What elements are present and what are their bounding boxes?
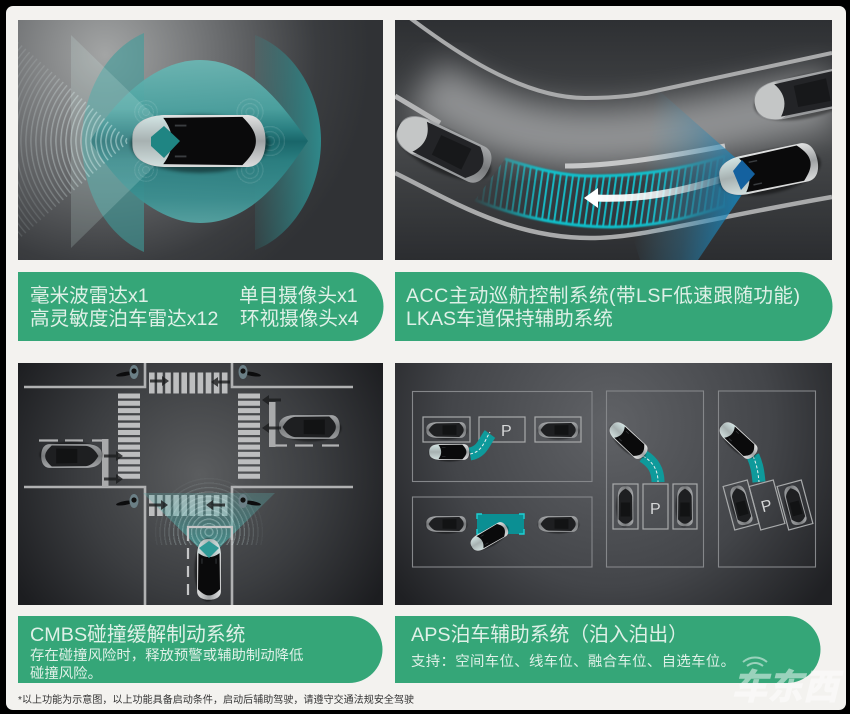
long range wedge xyxy=(71,36,154,248)
CMBS description: 碰撞风险。 xyxy=(30,665,102,682)
CMBS heading: CMBS碰撞缓解制动系统 xyxy=(30,624,245,646)
stop line left xyxy=(39,439,102,442)
parking car xyxy=(429,444,470,462)
crosswalk top xyxy=(149,372,229,394)
parked car xyxy=(538,422,579,440)
caption text right: 单目摄像头x1 xyxy=(239,285,358,307)
arrow xyxy=(150,376,169,386)
P labels: P xyxy=(759,497,774,516)
parking slots xyxy=(423,417,813,530)
arrow xyxy=(104,451,123,461)
dashed guide lines xyxy=(470,432,759,482)
frames xyxy=(412,391,816,567)
arrow xyxy=(104,474,123,484)
parked car xyxy=(426,422,467,440)
front camera cone xyxy=(143,493,275,548)
pedestrian bottom right xyxy=(238,494,261,508)
caption text left: 高灵敏度泊车雷达x12 xyxy=(30,308,218,330)
camera rings xyxy=(155,482,263,545)
left side sector xyxy=(82,33,144,252)
caption pill: sensors xyxy=(18,272,384,341)
P labels: P xyxy=(650,501,661,518)
parking car xyxy=(714,418,761,464)
caption text left: 毫米波雷达x1 xyxy=(30,285,149,307)
parked car xyxy=(616,486,633,527)
camera diamond xyxy=(199,541,219,558)
teal parking paths xyxy=(470,434,759,482)
ego car xyxy=(718,143,822,196)
car upper right xyxy=(752,69,832,122)
caption pill: ACC and LKAS xyxy=(395,272,833,341)
stop line right xyxy=(273,444,339,447)
sensor ripples xyxy=(132,96,288,186)
arrow xyxy=(149,500,168,510)
parked car xyxy=(538,516,579,534)
caption pill: CMBS xyxy=(18,616,382,683)
panel: ACC and LKAS xyxy=(387,18,850,260)
CMBS description xyxy=(30,647,303,682)
road highlight xyxy=(425,85,832,138)
road edges xyxy=(24,363,353,605)
camera diamond xyxy=(733,160,755,190)
panel: sensors xyxy=(18,20,383,260)
pedestrian top right xyxy=(238,365,261,379)
parked car xyxy=(675,486,693,527)
arrow xyxy=(262,423,281,433)
direction arrow xyxy=(584,178,725,208)
camera diamond xyxy=(151,126,180,158)
lane line middle xyxy=(565,146,725,166)
pedestrian bottom left xyxy=(116,494,138,508)
caption text right: 环视摄像头x4 xyxy=(240,308,359,330)
P labels: P xyxy=(501,423,512,440)
P labels xyxy=(501,423,774,518)
caption pill: APS xyxy=(395,616,820,683)
arrow xyxy=(262,395,281,405)
lane line dashed xyxy=(395,96,440,123)
CMBS description: 存在碰撞风险时，释放预警或辅助制动降低 xyxy=(30,647,303,664)
parked car xyxy=(426,516,467,534)
caption text: LKAS车道保持辅助系统 xyxy=(406,308,613,330)
parked car xyxy=(727,483,754,528)
coverage teardrop xyxy=(90,60,308,223)
panel: APS parking xyxy=(395,363,832,605)
panel: CMBS intersection xyxy=(18,363,383,605)
radar rings xyxy=(18,42,130,240)
caption text left xyxy=(30,285,218,330)
lane keeping band xyxy=(475,156,725,227)
arrow xyxy=(211,377,230,387)
lane line top xyxy=(410,18,832,98)
free space target xyxy=(477,514,524,534)
pedestrian top left xyxy=(116,365,138,379)
right side sector xyxy=(255,35,321,250)
APS description: 支持：空间车位、线车位、融合车位、自选车位。 xyxy=(411,653,735,670)
crosswalk bottom xyxy=(149,495,229,516)
right car xyxy=(278,415,342,442)
crosswalk right xyxy=(238,394,260,480)
left car xyxy=(39,441,103,468)
lane line bottom xyxy=(395,173,832,238)
parked car xyxy=(781,483,808,528)
caption text right xyxy=(239,285,359,330)
car top view xyxy=(130,115,269,173)
watermark: 车东西 xyxy=(732,668,844,707)
footnote: *以上功能为示意图，以上功能具备启动条件，启动后辅助驾驶，请遵守交通法规安全驾驶 xyxy=(18,693,414,706)
APS heading: APS泊车辅助系统（泊入泊出） xyxy=(411,624,688,646)
front camera cone xyxy=(640,98,742,260)
arrow xyxy=(206,500,225,510)
parking car xyxy=(604,418,651,464)
parking car xyxy=(468,519,512,555)
crosswalk left xyxy=(118,394,140,480)
caption text: ACC主动巡航控制系统(带LSF低速跟随功能) xyxy=(406,285,800,307)
caption text xyxy=(406,285,800,330)
car ahead left xyxy=(395,116,492,183)
ego car xyxy=(194,538,221,602)
ego lane xyxy=(188,527,232,600)
